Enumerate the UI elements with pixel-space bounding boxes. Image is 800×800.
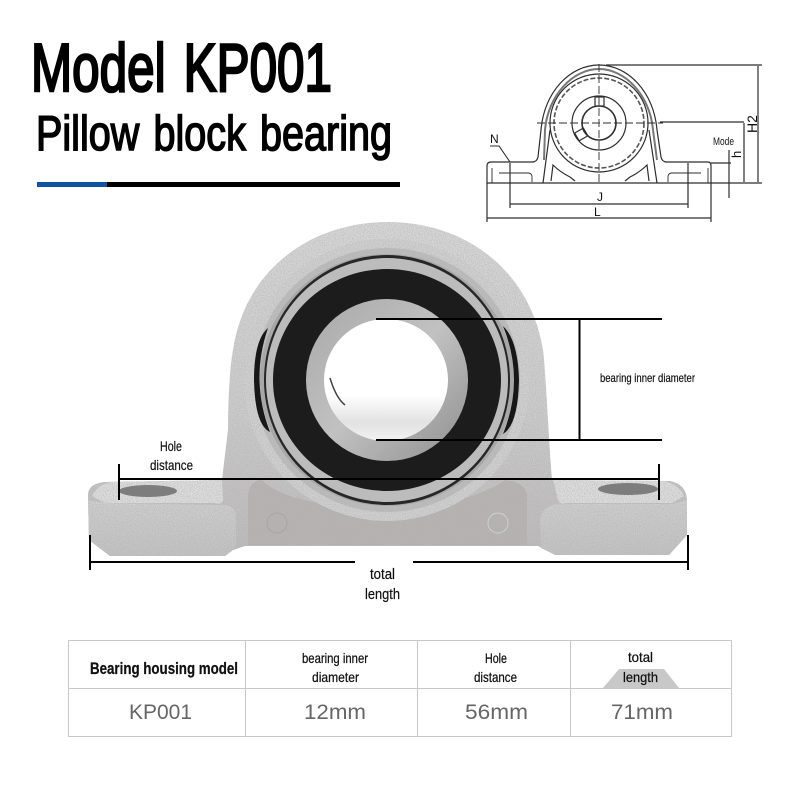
inner race [306,299,468,461]
slot right [503,326,519,434]
label: Hole [160,438,182,454]
value row: 71mm [611,701,673,724]
header row: bearing inner [302,650,368,666]
header row: Bearing housing model [90,659,238,678]
spec table [68,640,732,736]
title [31,30,392,161]
label: total [370,566,395,583]
heading: model: Model KP001 [31,30,332,106]
technical drawing [487,64,762,222]
drawing labels: Mode [713,136,734,148]
label [150,438,193,473]
bore [324,319,448,441]
header row: Hole [485,650,507,666]
label: bearing inner diameter [600,371,695,385]
drawing labels [490,115,760,219]
foot fronts [88,500,236,556]
heading: product name: Pillow block bearing [36,107,392,161]
rubber seal [273,269,501,491]
drawing labels: J [597,190,603,204]
value row: 12mm [304,701,366,724]
label [365,566,400,603]
table grid [68,640,732,736]
header row: distance [474,669,517,685]
base recess [248,480,527,545]
photo: pillow block bearing [88,222,687,556]
header row: length [623,669,658,685]
header row [90,649,658,685]
drawing labels: L [594,205,601,219]
value row: 56mm [465,701,528,724]
dimension: hole distance [119,438,659,500]
label: length [365,586,400,603]
slot left [254,328,270,432]
drawing labels: N [490,132,499,146]
drawing labels: H2 [744,115,760,133]
label: distance [150,457,193,473]
value row: KP001 [129,701,192,724]
base screw marks [267,513,287,533]
drawing labels: h [729,151,744,158]
shaded mark behind total length [603,669,679,688]
header row: diameter [312,669,359,685]
housing [88,222,687,556]
foot tops [92,480,223,504]
header row: total [628,649,653,665]
title underline [37,182,400,187]
value row [129,701,673,724]
mounting holes [119,485,177,497]
housing collar [244,239,530,521]
bearing rings [260,254,514,506]
dimension: total length [90,535,688,603]
dimension: bearing inner diameter [376,319,695,440]
